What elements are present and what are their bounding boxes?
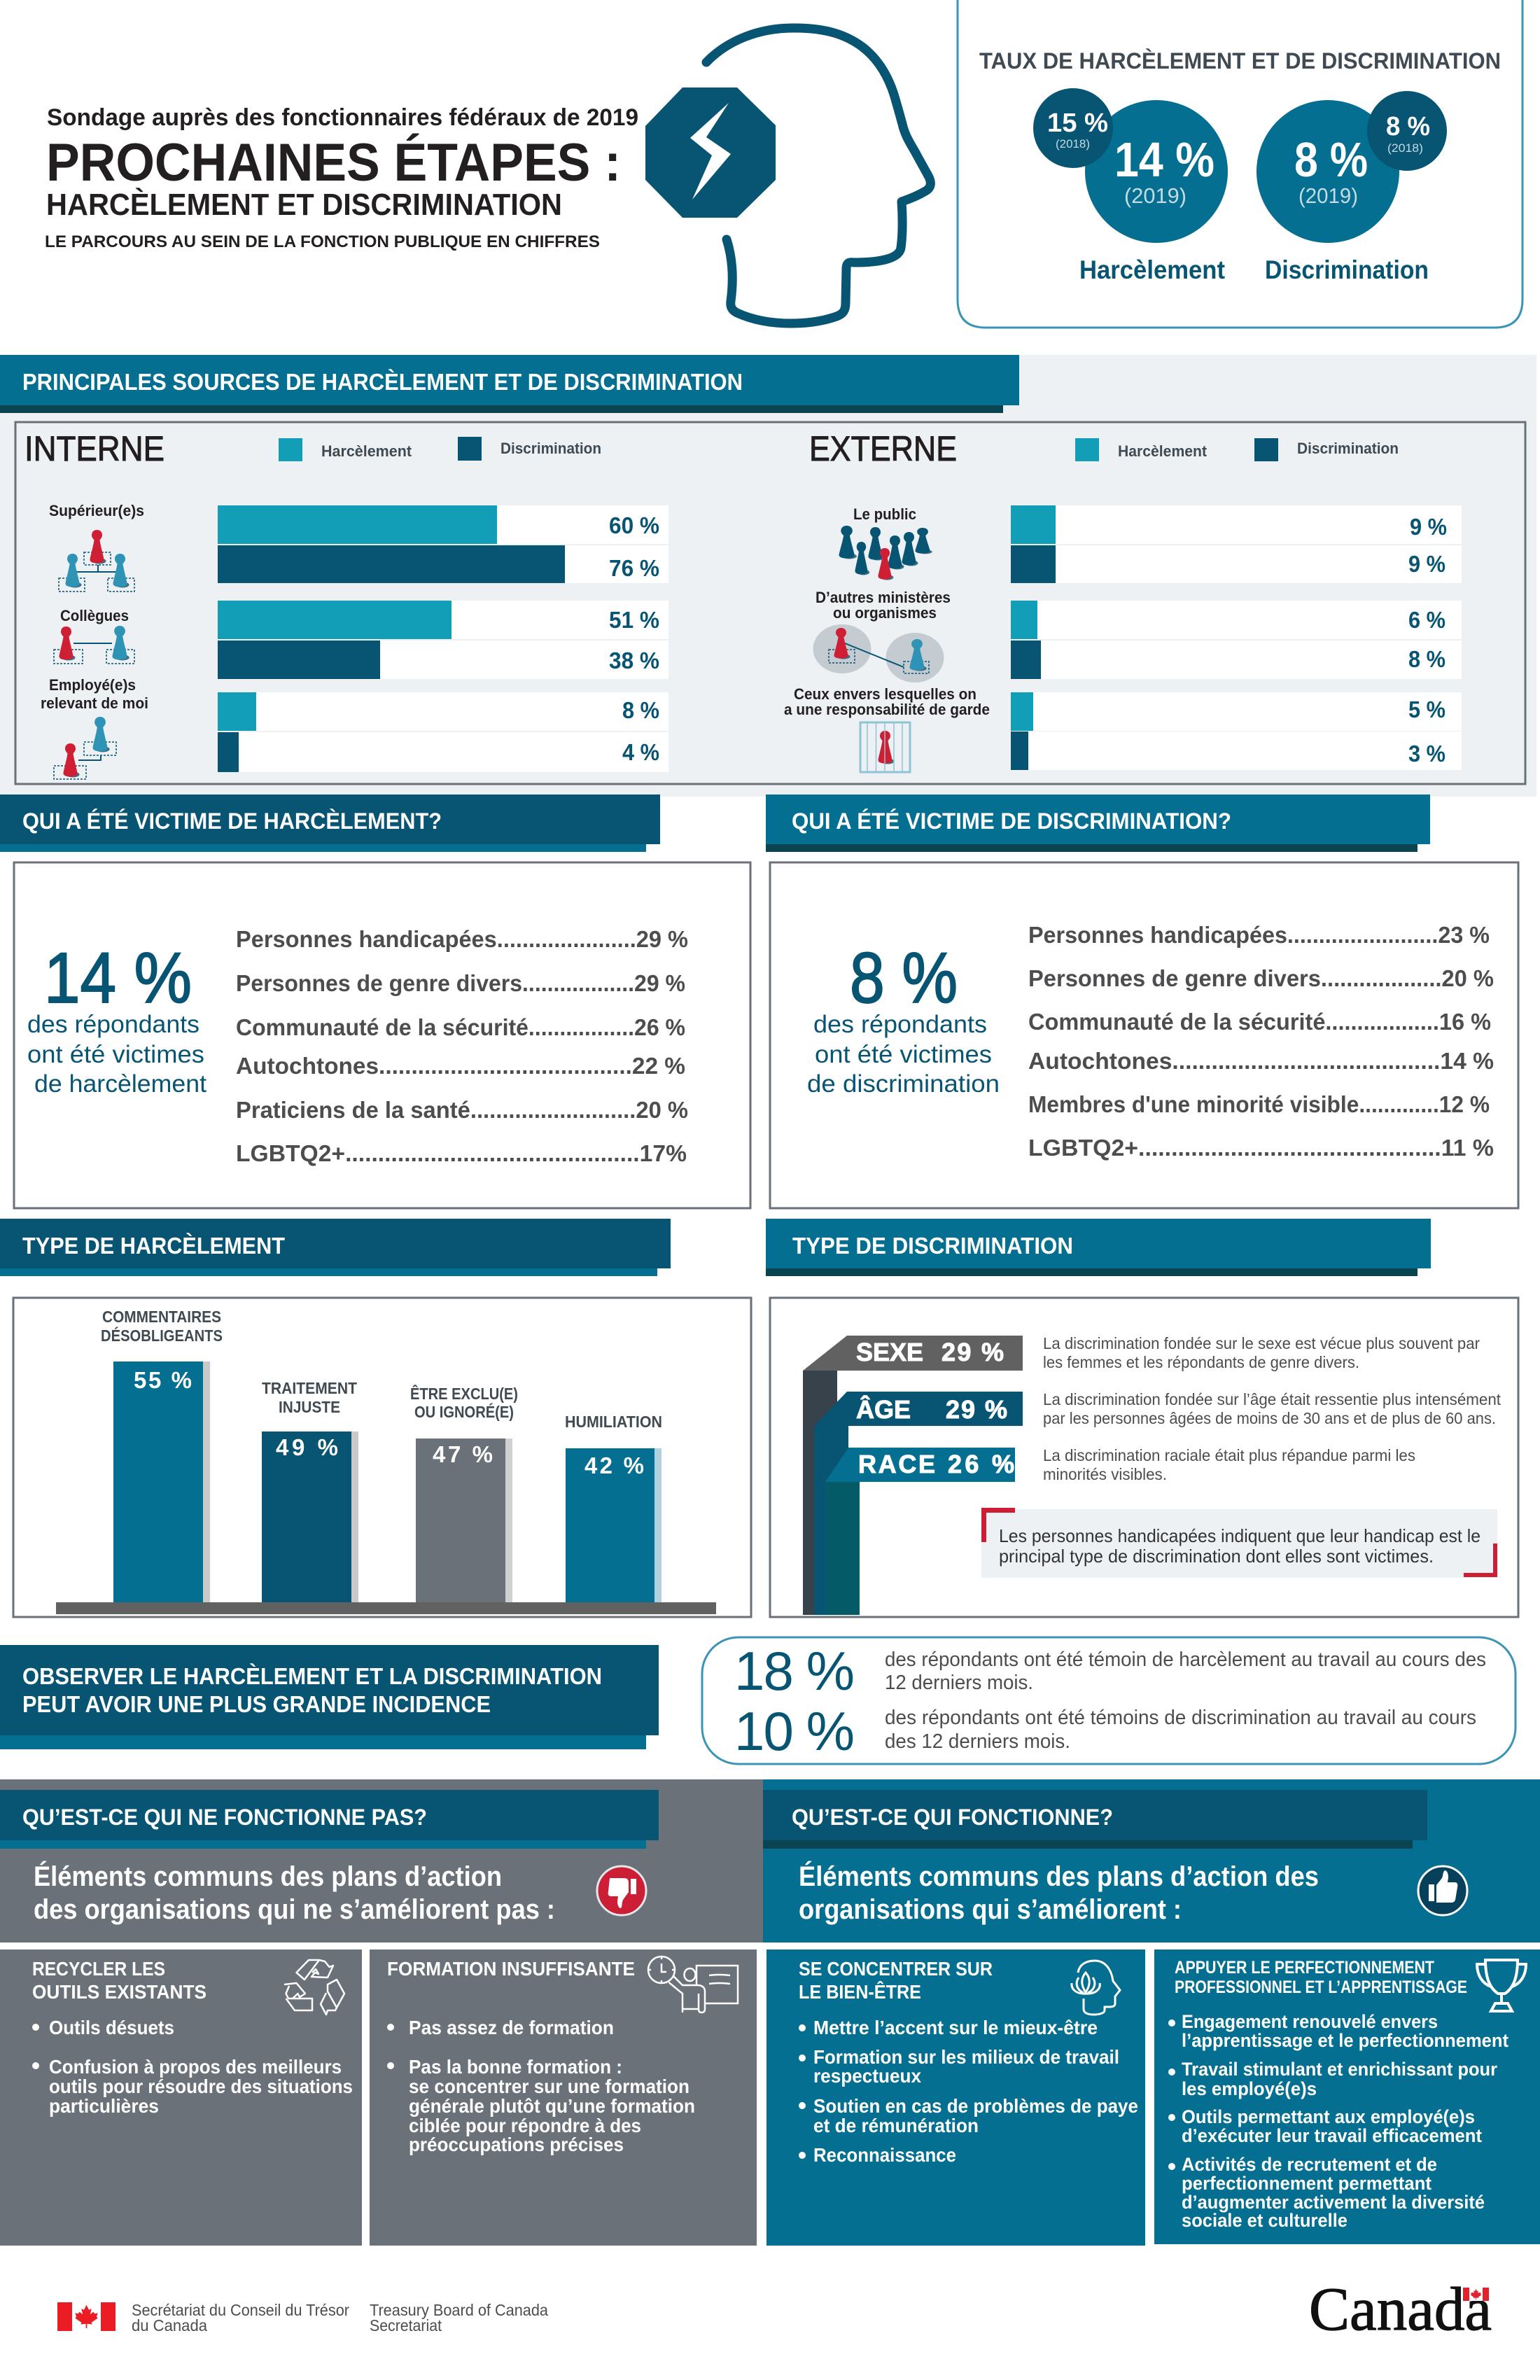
subheading: common elements improving: organisations qui s’améliorent : [799, 1894, 1182, 1925]
ribbon: race 26 percent: 26 % [948, 1450, 1014, 1478]
ribbon: sex 29 percent: 29 % [941, 1338, 1004, 1366]
panel: discrimination victims [770, 862, 1518, 1208]
icon: other departments: D’autres ministères [816, 589, 951, 606]
icon: supervisors [49, 502, 144, 592]
bar: excluded or ignored 47 percent [410, 1384, 518, 1602]
text: discrimination details: La discrimination fondée sur l’âge était ressentie plus intensément [1043, 1390, 1502, 1408]
bar: excluded or ignored 47 percent: 47 % [433, 1441, 493, 1467]
bar: unfair treatment 49 percent: TRAITEMENT [262, 1379, 357, 1397]
icon: custody: Ceux envers lesquelles on [794, 685, 976, 703]
footer: government signature [57, 2301, 548, 2334]
bar: demeaning comments 55 percent: 55 % [134, 1367, 192, 1393]
stat: 10 percent witnesses: des répondants ont été témoins de discrimination au travail au cours [885, 1707, 1476, 1729]
card: support professional development: APPUYER LE PERFECTIONNEMENT [1175, 1958, 1434, 1977]
icon: employees reporting to me: relevant de moi [41, 694, 148, 712]
card: support professional development: Activités de recrutement et de [1182, 2154, 1437, 2175]
ribbon: age 29 percent: ÂGE [856, 1394, 911, 1424]
banner: observing harassment: PEUT AVOIR UNE PLUS GRANDE INCIDENCE [22, 1691, 491, 1717]
bar chart: external: 8 % [1408, 646, 1446, 672]
callout: disability: principal type de discrimination dont elles sont victimes. [999, 1546, 1434, 1567]
icon: colleagues: Collègues [60, 607, 129, 624]
big stat: 14 percent: de harcèlement [34, 1070, 206, 1098]
big stat: 8 percent: ont été victimes [815, 1041, 992, 1068]
bar chart: external: 9 % [1410, 514, 1447, 540]
card: recycle existing tools: particulières [49, 2095, 159, 2117]
banner: observing harassment: OBSERVER LE HARCÈLEMENT ET LA DISCRIMINATION [22, 1663, 602, 1689]
card: focus on wellness: et de rémunération [813, 2115, 979, 2136]
subheading: common elements not improving: Éléments communs des plans d’action [34, 1861, 502, 1892]
card: insufficient training: Pas assez de formation [409, 2017, 614, 2038]
banner: type of discrimination [766, 1219, 1431, 1276]
card: insufficient training: Pas la bonne formation : [409, 2056, 622, 2078]
icon: custody: a une responsabilité de garde [784, 701, 990, 718]
legend: internal: Harcèlement [321, 442, 412, 460]
ribbon: age 29 percent: 29 % [946, 1395, 1007, 1424]
bar: humiliation 42 percent: HUMILIATION [565, 1413, 662, 1431]
subheading: common elements improving [799, 1861, 1319, 1925]
list: harassment groups: Autochtones.......................................22 % [236, 1053, 685, 1079]
circle: discrimination 2018 [1367, 91, 1447, 171]
panel: what does not work [0, 1779, 763, 1942]
bar chart: external [1011, 505, 1462, 770]
callout: disability [981, 1508, 1497, 1578]
circle: harassment 2018: 15 % [1047, 108, 1108, 138]
subheading: common elements not improving [34, 1861, 555, 1925]
card: focus on wellness: LE BIEN-ÊTRE [799, 1981, 921, 2003]
list: harassment groups: Communauté de la sécurité.................26 % [236, 1014, 685, 1040]
icon: other departments [813, 589, 951, 682]
circle: discrimination 2018: 8 % [1386, 112, 1430, 141]
section: main sources of harassment and discrimination [0, 355, 1536, 797]
header: survey title: HARCÈLEMENT ET DISCRIMINATION [46, 187, 562, 222]
stat: 18 percent witnesses: 12 derniers mois. [885, 1672, 1033, 1694]
text: discrimination details: minorités visibles. [1043, 1465, 1167, 1483]
banner: what works: QU’EST-CE QUI FONCTIONNE? [792, 1805, 1113, 1830]
big stat: 8 percent [807, 938, 1000, 1098]
card: support professional development: Travail stimulant et enrichissant pour [1182, 2059, 1497, 2080]
bar chart: internal: 51 % [609, 607, 659, 633]
card: focus on wellness: respectueux [813, 2065, 921, 2087]
icon: training [648, 1956, 738, 2012]
circle: discrimination 2018: (2018) [1387, 141, 1423, 155]
card: insufficient training: générale plutôt qu’une formation [409, 2095, 695, 2117]
legend: internal [279, 437, 601, 461]
icon: supervisors: Supérieur(e)s [49, 502, 144, 519]
panel: harassment types bar chart [13, 1298, 751, 1617]
circle: harassment 2018: (2018) [1056, 137, 1090, 150]
list: discrimination groups: Membres d'une minorité visible.............12 % [1028, 1091, 1490, 1117]
stat: 18 percent witnesses: 18 % [734, 1640, 855, 1702]
panel: external sources [784, 429, 1462, 772]
card: support professional development: Outils permettant aux employé(e)s [1182, 2106, 1475, 2127]
card: insufficient training: se concentrer sur une formation [409, 2076, 690, 2097]
circle: harassment 2018 [1033, 88, 1113, 168]
bar: unfair treatment 49 percent [262, 1379, 358, 1602]
bar: unfair treatment 49 percent: 49 % [276, 1434, 338, 1460]
panel: discrimination types [770, 1298, 1518, 1617]
banner: what does not work [0, 1790, 659, 1849]
ribbon: age 29 percent [814, 1392, 1023, 1615]
bar chart: external: 5 % [1408, 696, 1446, 722]
text: departmental names: du Canada [132, 2316, 207, 2334]
icon: thumbs up [1418, 1866, 1467, 1915]
list: discrimination groups: LGBTQ2+..............................................11 % [1028, 1135, 1494, 1161]
circle: harassment 2019 [1085, 100, 1228, 243]
heading: external: EXTERNE [809, 429, 957, 468]
header: survey title: PROCHAINES ÉTAPES : [46, 133, 621, 192]
banner: what works [763, 1790, 1427, 1849]
banner: type of harassment [0, 1219, 671, 1276]
legend: external [1075, 438, 1399, 461]
bar: humiliation 42 percent [565, 1413, 662, 1602]
banner: who experienced harassment: QUI A ÉTÉ VICTIME DE HARCÈLEMENT? [22, 808, 442, 834]
bar: demeaning comments 55 percent [101, 1308, 223, 1602]
text: discrimination details: par les personnes âgées de moins de 30 ans et de plus de 60 ans. [1043, 1409, 1496, 1427]
icon: the public [839, 505, 932, 580]
circle: harassment 2019: (2019) [1124, 183, 1186, 208]
card: support professional development: d’augmenter activement la diversité [1182, 2192, 1485, 2213]
ribbon: race 26 percent: RACE [858, 1450, 935, 1478]
stat: 18 percent witnesses [734, 1640, 1486, 1702]
big stat: 14 percent: 14 % [44, 938, 192, 1018]
callout: disability: Les personnes handicapées indiquent que leur handicap est le [999, 1525, 1480, 1546]
icon: head with stop sign and lightning bolt [645, 28, 930, 323]
panel: harassment victims [14, 862, 750, 1208]
text: departmental names: Secrétariat du Conseil du Trésor [132, 2301, 349, 2319]
card: focus on wellness: Mettre l’accent sur le mieux-être [813, 2017, 1098, 2038]
card: insufficient training [370, 1949, 757, 2246]
card: insufficient training: FORMATION INSUFFISANTE [387, 1958, 635, 1980]
icon: trophy [1477, 1960, 1526, 2011]
stat: 10 percent witnesses: des 12 derniers mois. [885, 1730, 1070, 1753]
header: survey title [45, 104, 638, 251]
banner: observing harassment [0, 1645, 659, 1749]
icon: employees reporting to me: Employé(e)s [49, 676, 136, 694]
banner: who experienced harassment [0, 794, 660, 852]
text: discrimination details: La discrimination fondée sur le sexe est vécue plus souvent par [1043, 1334, 1480, 1352]
banner: who experienced discrimination: QUI A ÉTÉ VICTIME DE DISCRIMINATION? [792, 808, 1231, 834]
bar chart: internal: 8 % [622, 697, 659, 723]
card: support professional development: d’exécuter leur travail efficacement [1182, 2125, 1482, 2146]
icon: head with lotus [1072, 1961, 1120, 2015]
icon: thumbs down [597, 1866, 646, 1915]
big stat: 14 percent: des répondants [27, 1011, 200, 1038]
big stat: 8 percent: de discrimination [807, 1070, 1000, 1098]
list: discrimination groups: Communauté de la sécurité..................16 % [1028, 1009, 1491, 1035]
legend: external: Harcèlement [1118, 442, 1208, 460]
bar: humiliation 42 percent: 42 % [584, 1452, 644, 1478]
ribbon: sex 29 percent: SEXE [856, 1338, 923, 1366]
bar chart: external: 9 % [1408, 551, 1446, 577]
circle: discrimination 2019 [1256, 100, 1399, 243]
bar: demeaning comments 55 percent: COMMENTAIRES [102, 1308, 221, 1326]
card: focus on wellness: SE CONCENTRER SUR [799, 1958, 993, 1980]
icon: recycle [284, 1960, 344, 2015]
icon: Canadian flag [57, 2302, 115, 2331]
big stat: 8 percent: des répondants [813, 1011, 987, 1038]
list: harassment groups: Personnes de genre divers..................29 % [236, 970, 685, 996]
card: insufficient training: préoccupations précises [409, 2134, 624, 2155]
card: support professional development: PROFESSIONNEL ET L’APPRENTISSAGE [1175, 1977, 1467, 1997]
subheading: common elements improving: Éléments communs des plans d’action des [799, 1861, 1319, 1892]
bar: demeaning comments 55 percent: DÉSOBLIGEANTS [101, 1326, 223, 1345]
ribbon: sex 29 percent [803, 1336, 1023, 1615]
circle: discrimination 2019: (2019) [1298, 183, 1358, 208]
icon: employees reporting to me [41, 676, 148, 779]
stat: 10 percent witnesses: 10 % [734, 1700, 855, 1762]
bar chart: external: 6 % [1408, 607, 1446, 633]
bar chart: external: 3 % [1408, 741, 1446, 766]
icon: the public: Le public [853, 505, 916, 523]
list: harassment groups: Praticiens de la santé..........................20 % [236, 1097, 688, 1123]
banner: who experienced discrimination [766, 794, 1430, 852]
logo: Canada wordmark: Canada [1309, 2276, 1492, 2344]
bar: unfair treatment 49 percent: INJUSTE [279, 1398, 340, 1416]
bar: excluded or ignored 47 percent: ÊTRE EXCLU(E) [410, 1384, 518, 1403]
banner: type of harassment: TYPE DE HARCÈLEMENT [22, 1233, 285, 1259]
card: support professional development: l’apprentissage et le perfectionnement [1182, 2030, 1508, 2051]
list: harassment groups [236, 926, 688, 1166]
card: recycle existing tools [0, 1949, 362, 2246]
banner: type of discrimination: TYPE DE DISCRIMINATION [792, 1233, 1073, 1259]
panel: what works [763, 1779, 1540, 1942]
big stat: 14 percent: ont été victimes [27, 1041, 204, 1068]
card: focus on wellness: Formation sur les milieux de travail [813, 2046, 1119, 2068]
bar chart: internal: 76 % [609, 555, 659, 581]
icon: custody [784, 685, 990, 772]
big stat: 14 percent [27, 938, 206, 1098]
card: focus on wellness [766, 1949, 1145, 2246]
bar chart: internal [218, 505, 668, 772]
banner: what does not work: QU’EST-CE QUI NE FONCTIONNE PAS? [22, 1805, 427, 1830]
labels: rates: Discrimination [1265, 255, 1429, 284]
card: support professional development [1154, 1949, 1540, 2244]
stat: 10 percent witnesses [734, 1700, 1476, 1762]
card: recycle existing tools: RECYCLER LES [32, 1958, 165, 1980]
text: departmental names: Secretariat [370, 2316, 442, 2334]
card: recycle existing tools: Outils désuets [49, 2017, 174, 2038]
text: departmental names [132, 2301, 548, 2334]
subheading: common elements not improving: des organisations qui ne s’améliorent pas : [34, 1894, 555, 1925]
bar: excluded or ignored 47 percent: OU IGNORÉ(E) [414, 1402, 514, 1421]
stat: 18 percent witnesses: des répondants ont été témoin de harcèlement au travail au cours des [885, 1648, 1486, 1671]
text: discrimination details: les femmes et les répondants de genre divers. [1043, 1353, 1359, 1371]
card: support professional development: Engagement renouvelé envers [1182, 2011, 1438, 2032]
list: discrimination groups [1028, 922, 1494, 1161]
icon: other departments: ou organismes [833, 604, 937, 622]
list: harassment groups: Personnes handicapées......................29 % [236, 926, 688, 952]
circle: harassment 2019: 14 % [1114, 132, 1214, 187]
banner: main sources: PRINCIPALES SOURCES DE HARCÈLEMENT ET DE DISCRIMINATION [22, 369, 743, 395]
header: survey title: LE PARCOURS AU SEIN DE LA FONCTION PUBLIQUE EN CHIFFRES [45, 232, 600, 251]
card: focus on wellness: Reconnaissance [813, 2144, 956, 2166]
heading: internal: INTERNE [24, 429, 164, 468]
ribbon: race 26 percent [825, 1448, 1015, 1615]
text: discrimination details: La discrimination raciale était plus répandue parmi les [1043, 1446, 1415, 1464]
card: insufficient training: ciblée pour répondre à des [409, 2115, 641, 2136]
card: recycle existing tools: OUTILS EXISTANTS [32, 1981, 206, 2003]
card: recycle existing tools: Confusion à propos des meilleurs [49, 2056, 342, 2078]
bar chart: internal: 4 % [622, 739, 659, 765]
list: harassment groups: LGBTQ2+.............................................17% [236, 1140, 687, 1166]
panel: witnesses [702, 1637, 1516, 1764]
text: discrimination details [1043, 1334, 1502, 1483]
icon: colleagues [54, 607, 134, 664]
panel: internal sources [24, 429, 668, 779]
bar chart: internal: 38 % [609, 648, 659, 673]
card: support professional development: sociale et culturelle [1182, 2210, 1348, 2231]
card: recycle existing tools: outils pour résoudre des situations [49, 2076, 353, 2097]
big stat: 8 percent: 8 % [850, 938, 958, 1018]
card: support professional development: les employé(e)s [1182, 2078, 1317, 2099]
card: focus on wellness: Soutien en cas de problèmes de paye [813, 2095, 1138, 2117]
list: discrimination groups: Personnes de genre divers...................20 % [1028, 965, 1494, 991]
banner: main sources [0, 355, 1019, 413]
bar chart: internal: 60 % [609, 512, 659, 538]
card: support professional development: perfectionnement permettant [1182, 2173, 1432, 2194]
list: discrimination groups: Autochtones.........................................14 % [1028, 1048, 1494, 1074]
labels: rates [1079, 255, 1429, 284]
list: discrimination groups: Personnes handicapées........................23 % [1028, 922, 1490, 948]
text: departmental names: Treasury Board of Canada [370, 2301, 548, 2319]
legend: external: Discrimination [1297, 440, 1399, 457]
heading: rates: TAUX DE HARCÈLEMENT ET DE DISCRIMINATION [979, 48, 1501, 74]
panel: harassment and discrimination rates [958, 0, 1522, 328]
circle: discrimination 2019: 8 % [1294, 132, 1368, 187]
labels: rates: Harcèlement [1079, 255, 1225, 284]
legend: internal: Discrimination [500, 440, 601, 457]
header: survey title: Sondage auprès des fonctionnaires fédéraux de 2019 [47, 104, 638, 131]
